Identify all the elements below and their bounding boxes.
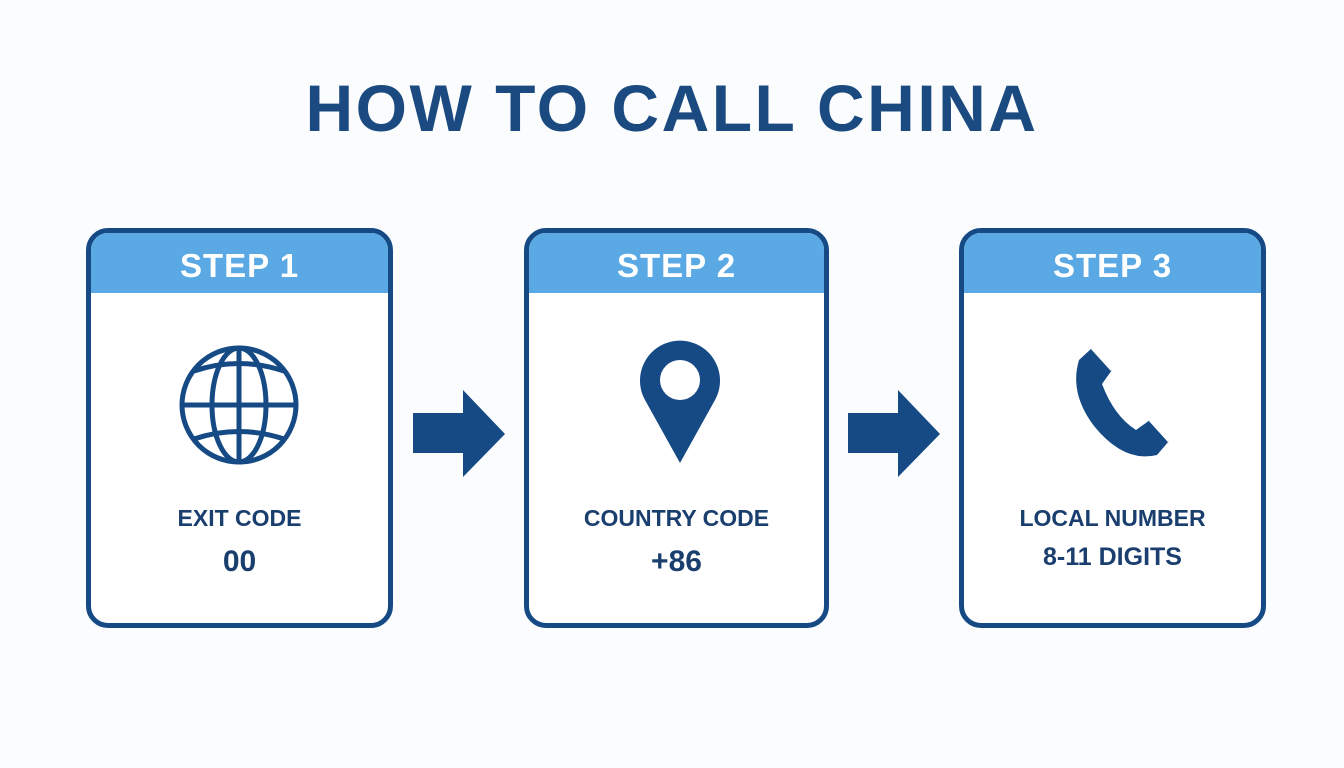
label: COUNTRY CODE <box>584 505 769 531</box>
label: LOCAL NUMBER <box>1019 505 1206 531</box>
icon: phone <box>1076 348 1169 456</box>
icon: globe <box>180 346 298 464</box>
header: step 1: STEP 1 <box>180 247 299 284</box>
header: step 3: STEP 3 <box>1053 247 1172 284</box>
panel: step 2 <box>524 228 829 628</box>
value: 8-11 DIGITS <box>1043 543 1182 571</box>
header: step 2 <box>529 233 824 293</box>
icon: location pin <box>640 340 720 463</box>
arrow 2 <box>848 390 940 477</box>
value: 00 <box>223 545 256 578</box>
title: HOW TO CALL CHINA <box>305 71 1039 145</box>
header: step 2: STEP 2 <box>617 247 736 284</box>
label: EXIT CODE <box>178 505 301 531</box>
header: step 1 <box>91 233 388 293</box>
arrow 1 <box>413 390 505 477</box>
header: step 3 <box>964 233 1261 293</box>
panel: step 1 <box>86 228 393 628</box>
value: +86 <box>651 545 702 578</box>
panel: step 3 <box>959 228 1266 628</box>
